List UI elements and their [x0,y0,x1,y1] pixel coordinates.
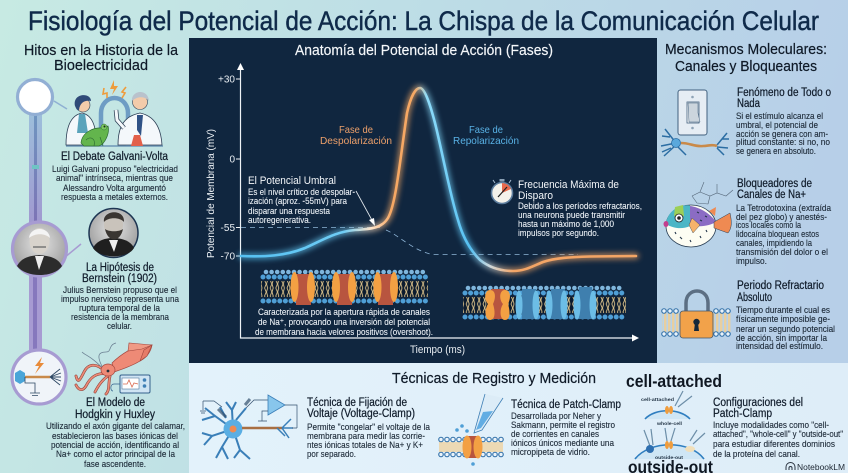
action potential curve [241,88,636,271]
text: todo o nada: umbral, el potencial de [736,120,818,130]
text: periodo refractario: Periodo Refractario [737,280,824,292]
text: Bernstein: resistencia de la membrana [71,312,169,322]
heading: mecanismos: Mecanismos Moleculares: [665,42,827,58]
callout: potencial umbral: disparar una respuesta [248,206,330,216]
callout: potencial umbral: El Potencial Umbral [248,175,336,187]
text: configuraciones: para estudiar diferentes dominios [713,439,835,449]
callout: potencial umbral: autoregenerativa. [248,215,311,225]
diagram: configuraciones del patch-clamp [635,391,705,461]
illustration: calamar [76,343,152,394]
text: descripción de la despolarización: de Na⁺, provocando una inversión del potencial [258,317,430,327]
text: configuraciones [713,397,843,459]
text: bloqueadores: transmisión del dolor o el [736,247,828,257]
icon: micropipeta y canal [439,394,503,466]
heading: mecanismos: Canales y Bloqueantes [675,59,817,75]
callout: frecuencia máxima: Frecuencia Máxima de [518,179,619,191]
text: descripción de la despolarización: Caracterizada por la apertura rápida de canales [258,307,430,317]
callout: frecuencia máxima: Disparo [518,190,553,202]
panel: anatomía del potencial [189,38,657,363]
chart axes: Tiempo (ms) [410,344,465,356]
text: Bernstein: impulso nervioso representa una [61,294,179,304]
chart axes: -55 [221,223,235,234]
text: patch clamp: iónicos únicos mediante una [511,438,614,448]
heading: historia: Hitos en la Historia de la [24,43,179,59]
heading: mecanismos [665,42,827,75]
diagram: configuraciones del patch-clamp: cell-attached [641,397,674,403]
text: voltage clamp: membrana para medir las corrie- [307,431,425,441]
text: Galvani-Volta: Alessandro Volta argumentó [63,183,166,193]
callout: frecuencia máxima [518,179,642,238]
text: todo o nada: plitud constante: si no, no [736,137,830,147]
text: todo o nada: Si el estímulo alcanza el [736,111,823,121]
label: repolarización: Repolarización [453,135,519,147]
text: patch clamp: Técnica de Patch-Clamp [511,399,621,411]
arrow: umbral [356,191,375,226]
text: bloqueadores: canales, impidiendo la [736,238,812,248]
heading: técnicas: Técnicas de Registro y Medición [392,371,596,387]
threshold and resting dashed lines [241,228,578,254]
text: Bernstein: La Hipótesis de [86,262,154,274]
text: periodo refractario: Absoluto [737,292,772,304]
text: patch clamp: micropipeta de vidrio. [511,447,590,457]
text: Bernstein: Bernstein (1902) [82,273,157,285]
text: periodo refractario: Tiempo durante el cual es [736,305,830,315]
icon: axon node [12,350,66,404]
text: Hodgkin y Huxley: Na+ como el actor principal de la [56,449,175,459]
label: despolarización: Fase de [339,124,373,136]
text: voltage clamp: Voltaje (Voltage-Clamp) [307,408,415,420]
icon: candado en membrana [662,291,732,338]
panel: mecanismos moleculares [661,42,835,351]
callout: potencial umbral: Es el nivel crítico de despolar- [248,187,355,197]
logo: NotebookLM: NotebookLM [797,463,845,472]
text: todo o nada: Fenómeno de Todo o [737,87,831,99]
text: Hodgkin y Huxley: El Modelo de [86,397,145,409]
text: bloqueadores: Bloqueadores de [737,178,812,190]
icon: interruptor y neurona [661,90,729,156]
callout: potencial umbral: ización (aproz. -55mV) para [248,196,347,206]
text: todo o nada: acción se genera con am- [736,129,828,139]
chart axes: -70 [221,252,235,262]
text: Galvani-Volta: El Debate Galvani-Volta [61,151,169,163]
callout: potencial umbral [248,175,355,225]
text: Galvani-Volta: animal" intrínseca, mientras que [56,173,173,183]
text: Hodgkin y Huxley: potencial de acción, identificando al [51,440,179,450]
label: despolarización [320,124,392,147]
icon: neurona con amplificador [200,395,297,459]
text: todo o nada: Nada [737,98,760,110]
chart axes: 0 [229,154,235,166]
icon: retrato de Bernstein [89,208,138,258]
label: cell-attached grande: cell-attached [626,371,722,391]
chart axes: Potencial de Membrana (mV) [205,129,217,258]
heading: anatomía: Anatomía del Potencial de Acción (Fases) [295,43,553,59]
label: repolarización: Fase de [469,124,503,136]
panel: historia [12,43,185,469]
text: voltage clamp: ntes iónicas totales de Na+ y K+ [307,440,423,450]
panel: técnicas de registro [200,371,845,473]
text: voltage clamp: Técnica de Fijación de [307,397,407,409]
timeline [18,80,81,352]
text: configuraciones: Configuraciones del [713,397,803,409]
text: Hodgkin y Huxley: Hodgkin y Huxley [75,409,155,421]
text: periodo refractario [736,280,835,351]
text: Galvani-Volta: respuesta a metales externos. [61,192,168,202]
text: voltage clamp: por separado. [307,449,356,459]
heading: historia [24,43,179,74]
heading: historia: Bioelectricidad [54,58,148,74]
text: configuraciones: Incluye modalidades como "cell- [713,420,829,430]
callout: frecuencia máxima: Debido a los períodos refractarios, [518,201,642,211]
text: voltage clamp [307,397,430,459]
text: todo o nada [736,87,831,156]
text: configuraciones: Patch-Clamp [713,408,772,420]
text: voltage clamp: Permite "congelar" el voltaje de la [307,422,430,432]
membrane: canales de Na abiertos [261,272,428,305]
text: patch clamp: Desarrollada por Neher y [511,411,601,421]
label: repolarización [453,124,519,147]
text: bloqueadores: La Tetrodotoxina (extraída [736,203,831,213]
text: Galvani-Volta [52,151,178,202]
text: descripción de la despolarización: de membrana hacia velores positivos (overshoot). [255,327,433,337]
label: despolarización: Despolarización [320,135,392,147]
text: bloqueadores: lidocaína bloquean estos [736,229,819,239]
icon: molécula y pez globo [664,182,733,247]
text: Galvani-Volta: Luigi Galvani propuso "electricidad [52,164,178,174]
text: configuraciones: de la proteína del canal. [713,449,800,459]
text: patch clamp: Sakmann, permite el registro [511,420,615,430]
diagram: configuraciones del patch-clamp: outside-out [655,455,683,461]
icon: cronómetro [492,179,512,204]
membrane: canales de K [463,287,626,320]
text: bloqueadores: Canales de Na+ [737,189,806,201]
text: Hodgkin y Huxley: establecieron las bases iónicas del [52,431,178,441]
text: Hodgkin y Huxley: fase ascendente. [84,459,146,469]
text: todo o nada: se genera en absoluto. [736,146,816,156]
text: periodo refractario: de acción, sin importar la [736,333,827,343]
text: descripción de la despolarización [255,307,433,337]
text: Hodgkin y Huxley: Utilizando el axón gigante del calamar, [46,421,185,431]
text: bloqueadores [736,178,831,266]
illustration: Galvani y Volta [66,80,163,146]
panel: técnicas background [189,363,848,473]
chart axes: +30 [218,74,235,86]
text: bloqueadores: impulso. [736,256,767,266]
text: periodo refractario: físicamente imposible ge- [736,314,830,324]
text: periodo refractario: intensidad del estímulo. [736,341,823,351]
text: Hodgkin y Huxley [46,397,185,469]
text: Bernstein: Julius Bernstein propuso que el [63,285,177,295]
text: Bernstein: celular. [107,321,132,331]
callout: frecuencia máxima: impulsos por segundo. [518,228,599,238]
text: Bernstein [61,262,179,331]
text: Bernstein: ruptura temporal de la [79,303,160,313]
icon: portrait node [12,222,66,276]
text: bloqueadores: del pez globo) y anestés- [736,212,827,222]
text: bloqueadores: icos locales como la [736,220,801,230]
text: patch clamp: de corrientes en canales [511,429,599,439]
chart axes [205,63,639,356]
diagram: configuraciones del patch-clamp: whole-cell [656,421,682,427]
callout: frecuencia máxima: hasta un máximo de 1,000 [518,219,614,229]
callout: frecuencia máxima: una neurona puede transmitir [518,210,625,220]
text: periodo refractario: nerar un segundo potencial [736,324,835,334]
text: patch clamp [511,399,621,457]
